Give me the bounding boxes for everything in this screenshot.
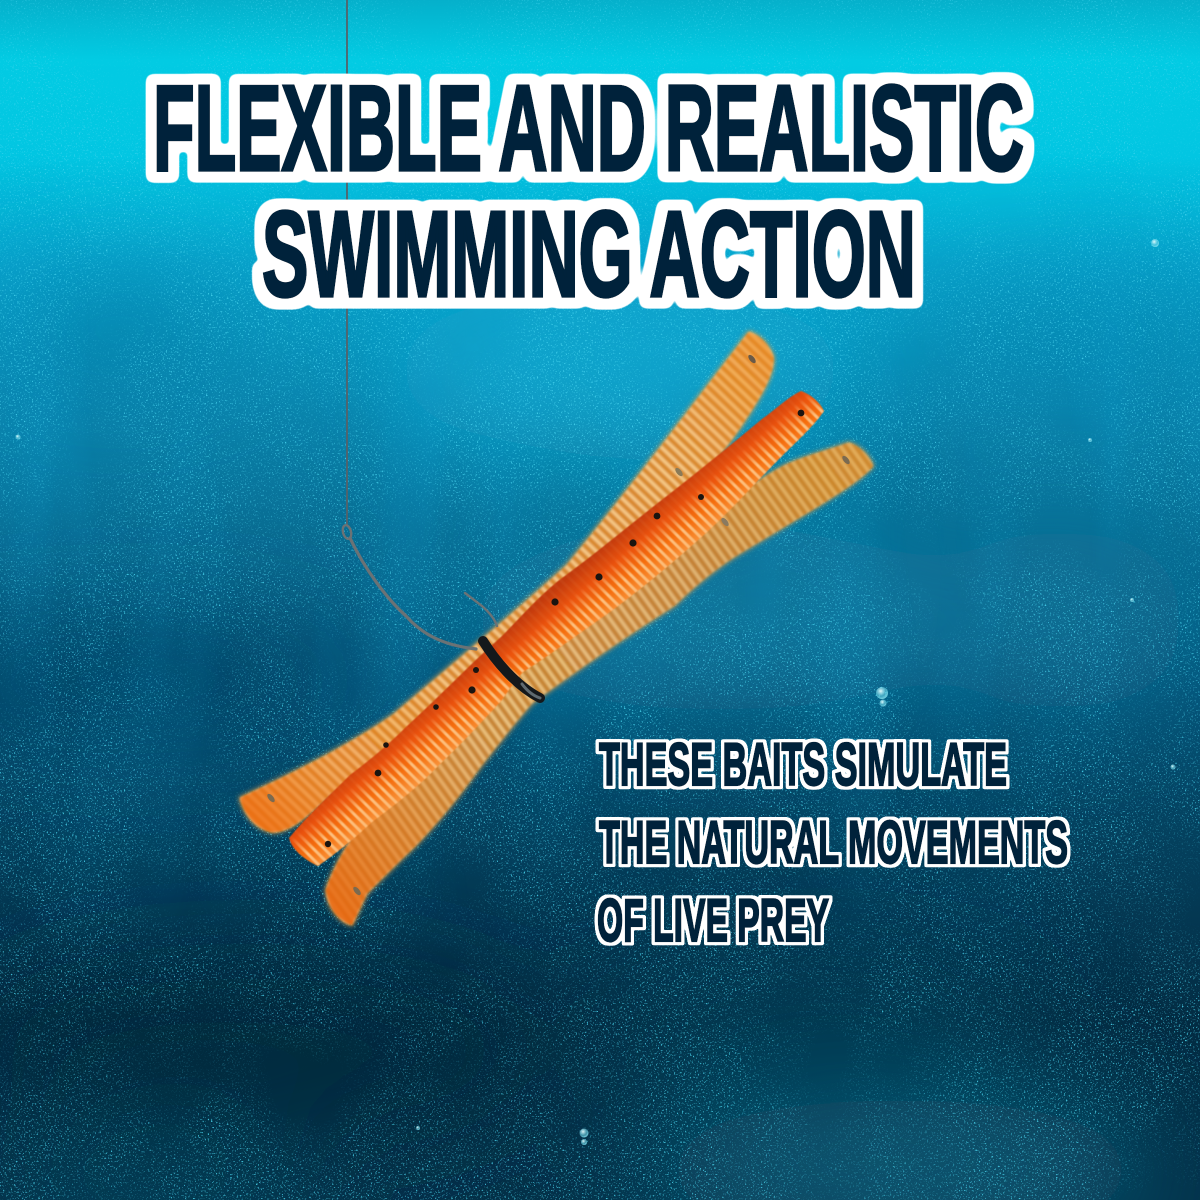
caption text [597,731,1068,954]
bubbles [16,239,1176,1145]
main orange worm [289,391,824,866]
rubber ring [483,641,540,698]
caption text: OF LIVE PREY [597,887,829,954]
back worm: lower blur position [326,443,873,925]
back worm: upper blur position [240,332,773,832]
fishing hook [341,524,497,649]
worm spots [325,410,804,847]
title [153,60,1024,322]
fishing line [346,0,348,526]
